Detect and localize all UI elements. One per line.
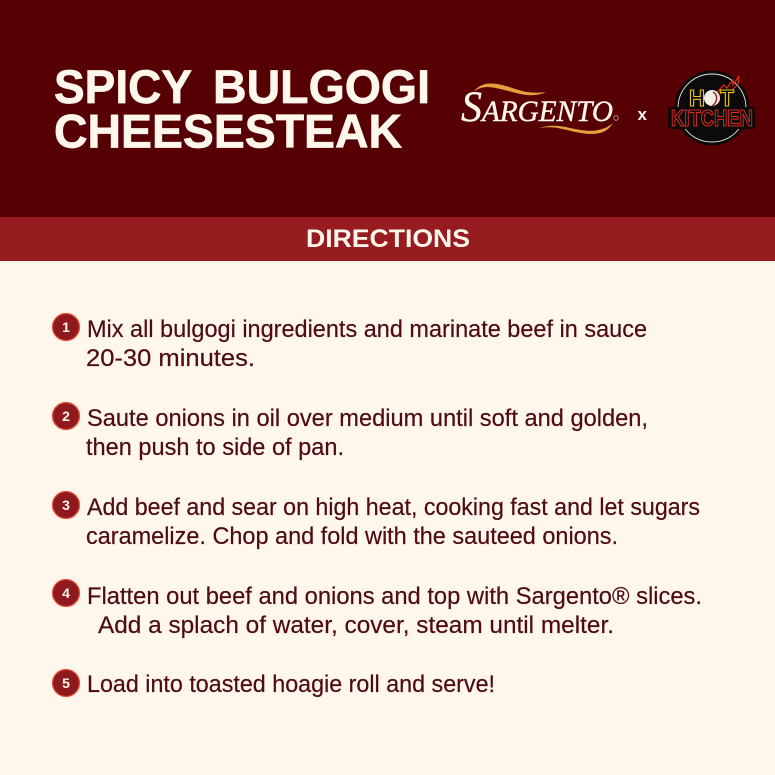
step 4 badge: 4 [62, 585, 70, 601]
logo: Sargento: SARGENTO [461, 84, 613, 131]
panel: header [0, 0, 775, 217]
title: BULGOGI [213, 60, 430, 113]
step 3 text: Add beef and sear on high heat, cooking fast and let sugars [87, 494, 700, 521]
step 2 badge [52, 402, 80, 430]
step 5 text: Load into toasted hoagie roll and serve! [87, 671, 495, 698]
step 4 text: Add a splach of water, cover, steam until melter. [98, 612, 614, 639]
step 3 text [86, 494, 700, 550]
panel: directions band [0, 217, 775, 261]
step 5 badge: 5 [62, 675, 70, 691]
step 1 text [86, 316, 647, 372]
step 3 text: caramelize. Chop and fold with the sauteed onions. [86, 523, 618, 550]
title: CHEESESTEAK [54, 104, 402, 158]
step 2 text [86, 405, 648, 461]
logo: Hot Kitchen: KITCHEN [671, 105, 753, 131]
step 3 badge [52, 492, 80, 518]
logo: Hot Kitchen [668, 70, 755, 146]
step 2 [52, 402, 648, 461]
step 1 badge [52, 314, 80, 340]
step 1 text: 20-30 minutes. [86, 345, 255, 372]
heading: directions: DIRECTIONS [306, 225, 470, 253]
step 3 badge: 3 [62, 497, 70, 513]
step 3 [52, 492, 700, 550]
title [54, 60, 430, 158]
title: SPICY [54, 60, 192, 113]
step 5 badge [52, 670, 80, 696]
step 4 badge [52, 580, 80, 606]
step 2 badge: 2 [62, 408, 70, 424]
step 1 badge: 1 [62, 319, 70, 335]
step 4 text [87, 583, 702, 639]
step 2 text: Saute onions in oil over medium until soft and golden, [87, 405, 648, 432]
logo: Hot Kitchen: T [720, 85, 734, 111]
x separator: x [638, 105, 648, 124]
step 5 [52, 670, 495, 698]
logo: Hot Kitchen: H [689, 85, 705, 111]
step 1 text: Mix all bulgogi ingredients and marinate beef in sauce [87, 316, 647, 343]
step 2 text: then push to side of pan. [86, 434, 344, 461]
step 4 text: Flatten out beef and onions and top with Sargento® slices. [87, 583, 702, 610]
step 4 [52, 580, 702, 639]
step 1 [52, 314, 647, 372]
